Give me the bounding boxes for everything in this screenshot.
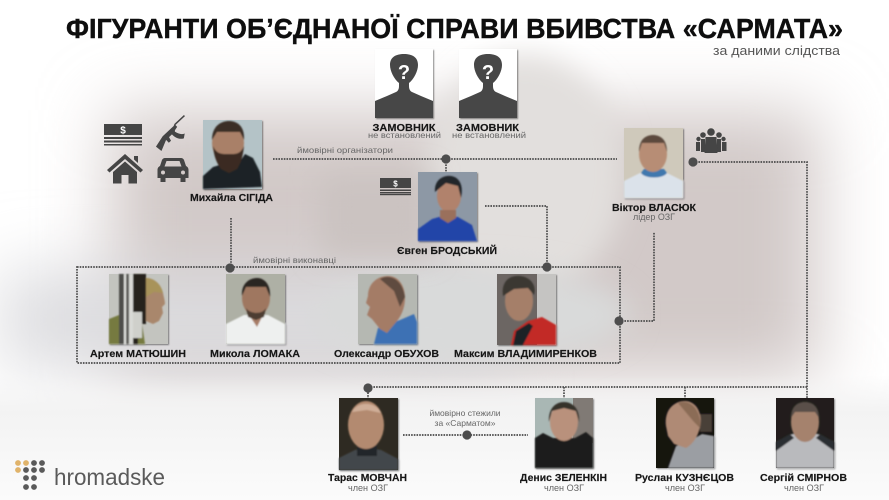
label: probable organisers: ймовірні організатори: [297, 145, 393, 155]
photo: Brodsky: [418, 172, 477, 241]
photo: Smirnov: [776, 398, 834, 468]
name: Zelenkin: [520, 472, 607, 494]
name: Smirnov: [760, 472, 847, 494]
name: Matyushin: Артем МАТЮШИН: [90, 348, 186, 360]
name: customer 1: не встановлений: [368, 131, 441, 140]
photo: Movchan: [339, 398, 398, 470]
name: Vlasyuk: [612, 202, 697, 223]
subtitle: за даними слідства: [713, 44, 840, 58]
photo: Obukhov: [358, 274, 417, 344]
icon: group of people: [696, 128, 726, 153]
icon: money stack Brodsky: $: [393, 180, 398, 188]
photo: customer unknown 1: ?: [398, 62, 410, 84]
name: Zelenkin: Денис ЗЕЛЕНКІН: [520, 472, 607, 484]
photo: customer unknown 2: ?: [482, 62, 494, 84]
name: Movchan: [328, 472, 407, 494]
name: Movchan: член ОЗГ: [348, 483, 388, 494]
name: Kuznetsov: Руслан КУЗНЄЦОВ: [635, 472, 734, 484]
name: Smirnov: Сергій СМІРНОВ: [760, 472, 847, 484]
icon: money stack: [104, 124, 142, 146]
label: probable perpetrators: ймовірні виконавці: [253, 255, 336, 265]
photo: Kuznetsov: [656, 398, 714, 468]
label: probably followed Sarmat: [429, 408, 501, 428]
name: Obukhov: Олександр ОБУХОВ: [334, 348, 439, 360]
label: probably followed Sarmat: ймовірно стежили: [429, 408, 501, 418]
name: customer 1: [368, 122, 441, 140]
name: Smirnov: член ОЗГ: [784, 483, 824, 494]
photo: Vladymyrenko: [497, 274, 556, 345]
logo: hromadske: [15, 460, 165, 490]
name: customer 2: ЗАМОВНИК: [456, 122, 520, 134]
name: Sigida: Михайла СІГІДА: [190, 192, 273, 204]
logo: hromadske: hromadske: [54, 464, 165, 490]
icon: money stack: $: [120, 126, 126, 136]
name: customer 2: [452, 122, 526, 140]
photo: customer unknown 1: [375, 49, 433, 118]
name: customer 1: ЗАМОВНИК: [372, 122, 436, 134]
title: ФІГУРАНТИ ОБ’ЄДНАНОЇ СПРАВИ ВБИВСТВА «САРМАТА»: [66, 13, 843, 44]
icon: house: [107, 154, 143, 184]
name: Zelenkin: член ОЗГ: [544, 483, 584, 494]
name: Lomaka: Микола ЛОМАКА: [210, 348, 300, 360]
icon: assault rifle: [153, 115, 196, 156]
label: probably followed Sarmat: за «Сарматом»: [435, 418, 496, 428]
photo: Zelenkin: [535, 398, 593, 468]
name: Kuznetsov: член ОЗГ: [665, 483, 705, 494]
photo: customer unknown 2: [459, 49, 517, 118]
photo: Matyushin: [109, 274, 168, 344]
photo: Vlasyuk: [624, 128, 683, 198]
name: Kuznetsov: [635, 472, 734, 494]
icon: car: [158, 158, 188, 182]
photo: Lomaka: [226, 274, 285, 344]
name: Vlasyuk: лідер ОЗГ: [633, 212, 675, 223]
name: customer 2: не встановлений: [452, 131, 526, 140]
name: Brodsky: Євген БРОДСЬКИЙ: [397, 244, 497, 257]
photo: Sigida: [203, 120, 262, 189]
icon: money stack Brodsky: [380, 178, 411, 195]
name: Movchan: Тарас МОВЧАН: [328, 472, 407, 484]
name: Vlasyuk: Віктор ВЛАСЮК: [612, 202, 697, 214]
name: Vladymyrenko: Максим ВЛАДИМИРЕНКОВ: [454, 348, 597, 360]
connector lines: [77, 154, 807, 440]
